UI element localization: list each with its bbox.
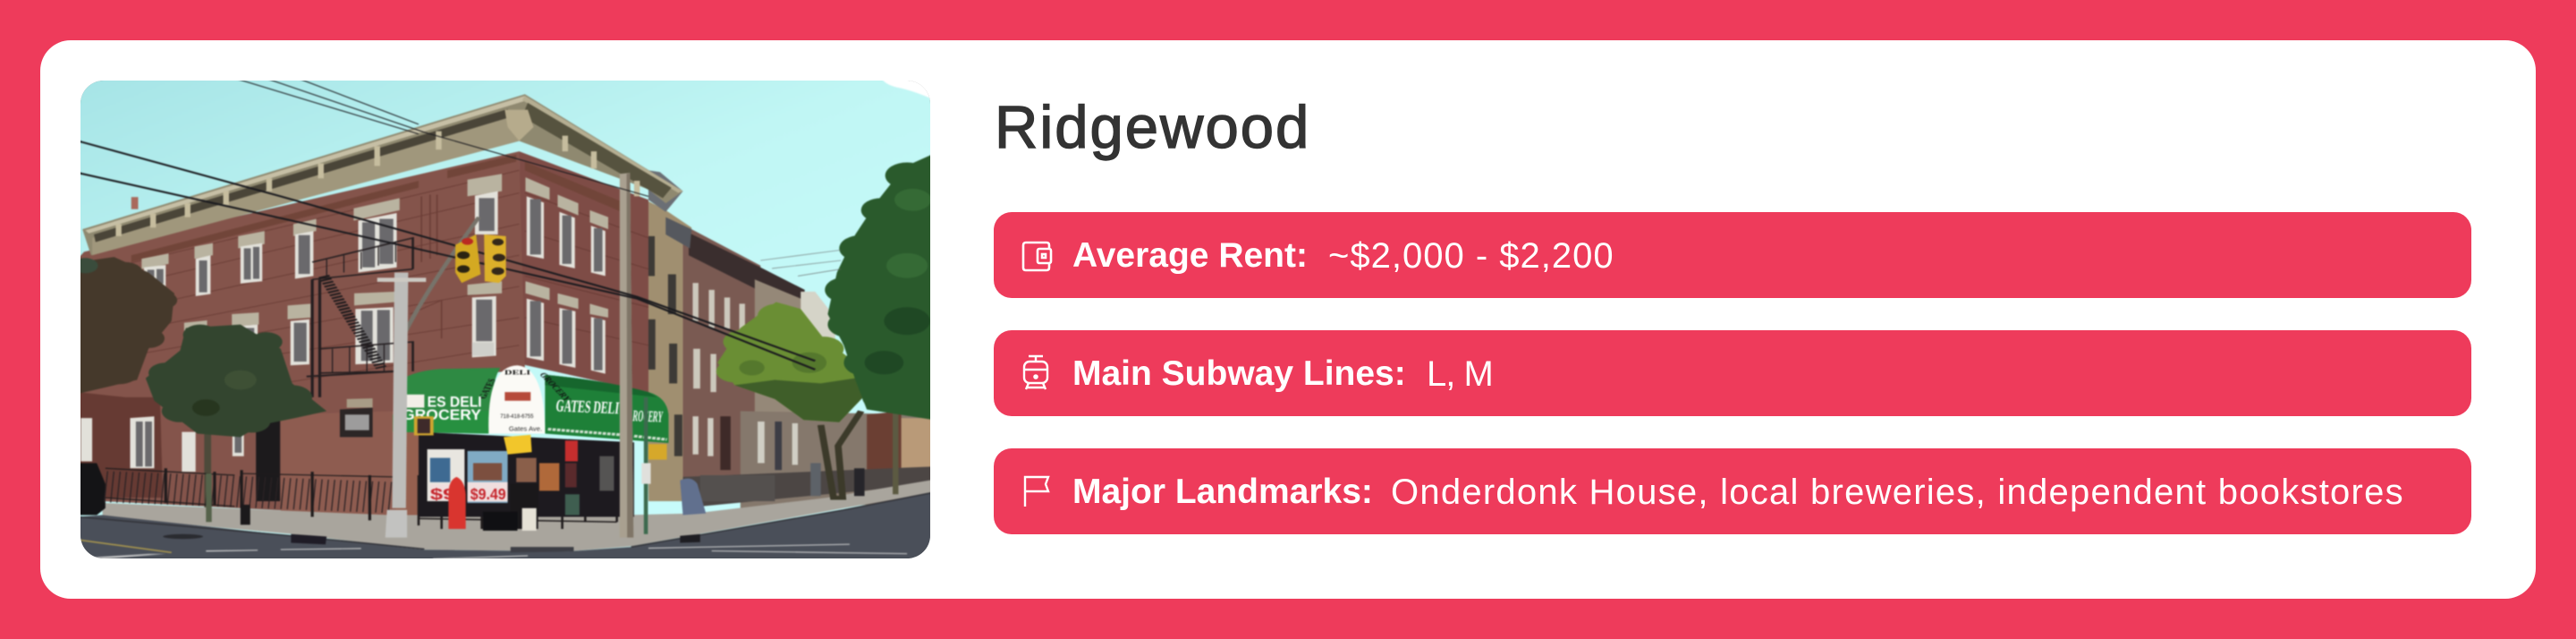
row: average rent [994,212,2471,298]
right tree [825,154,933,420]
awning: GATES [477,378,499,400]
awning: GROCERY [537,371,573,403]
awning: ES DELI [428,394,482,410]
awning [393,365,668,443]
wooden utility pole [620,173,651,538]
label and value: rent [1072,236,1614,276]
row: subway lines [994,330,2471,416]
fire escape [307,238,413,397]
parked car [78,463,106,515]
photo: Gates Deli corner building [80,81,930,558]
sky [78,78,933,561]
street light pole [377,217,479,538]
photo: Gates Deli corner building: ROCERY [631,407,664,426]
front tree [146,325,326,522]
overhead wires [78,78,841,370]
iron fence [106,468,617,529]
left tree [72,257,177,394]
awning: Gates Ave. [509,425,542,433]
icon: tram [1023,354,1048,390]
storefront: $9.49 [470,486,506,503]
people and covered cart [680,463,865,515]
windows [80,174,608,501]
main building left facade [78,151,525,516]
label and value: rent: Average Rent: [1072,236,1308,275]
awning: GROCERY [402,406,481,423]
awning: DELI [504,370,530,377]
main building right facade [519,151,648,392]
hydrant and sign [206,473,250,524]
sidewalk and road [78,480,933,561]
pedestrian signal [414,416,434,435]
label and value: subway: Main Subway Lines: [1072,354,1406,393]
label and value: subway: L, M [1427,354,1493,394]
awning: 718-418-6755 [500,413,534,420]
label and value: landmarks: Onderdonk House, local breweries, independent bookstores [1391,473,2404,512]
awning: GATES DELI [555,396,620,418]
icon: flag [1023,476,1050,507]
brick courses [91,170,648,383]
row: landmarks [994,448,2471,534]
title: Ridgewood [995,94,1310,161]
storefront [419,432,667,531]
cornice [82,94,683,262]
label and value: landmarks: Major Landmarks: [1072,473,1373,511]
middle tree [716,302,898,498]
label and value: rent: ~$2,000 - $2,200 [1328,236,1614,276]
icon: wallet [1021,242,1052,272]
traffic lights [455,234,506,283]
far row buildings [646,170,933,512]
storefront: $9. [430,486,462,503]
